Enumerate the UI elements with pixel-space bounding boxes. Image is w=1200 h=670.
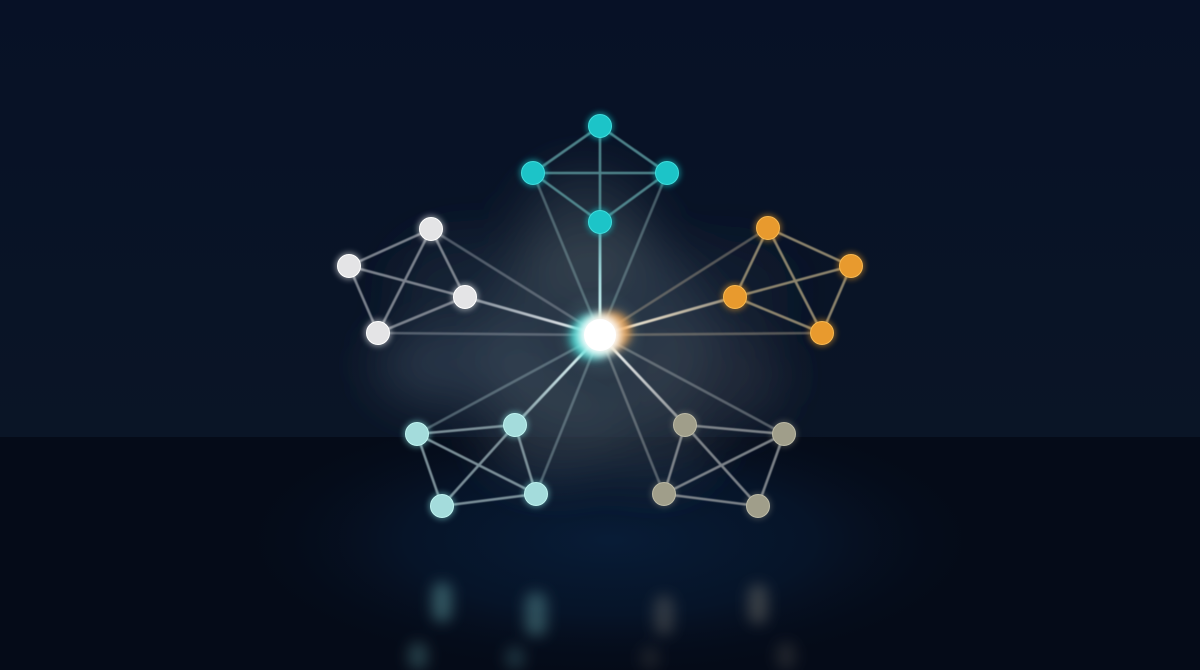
spokes: beige cluster — [600, 335, 784, 494]
spokes: light teal cluster — [417, 335, 600, 494]
reflection: beige nodes — [640, 584, 796, 670]
spokes: orange cluster — [600, 228, 822, 335]
white cluster links — [349, 229, 465, 333]
cluster: light teal (lower left) — [404, 412, 550, 520]
spokes: white cluster — [378, 229, 600, 335]
cluster: orange (right) — [722, 214, 864, 346]
floor reflections — [408, 582, 796, 670]
cluster: teal (top) — [520, 112, 680, 236]
cluster: white (left) — [336, 216, 478, 346]
beige cluster links — [664, 425, 784, 506]
reflection: teal nodes — [408, 582, 547, 670]
central glowing hub — [554, 289, 646, 381]
spokes: teal cluster — [533, 173, 667, 335]
orange cluster links — [735, 228, 851, 333]
white cluster nodes — [336, 216, 478, 346]
teal cluster links — [533, 126, 667, 222]
orange cluster nodes — [722, 214, 864, 346]
background wall — [0, 0, 1200, 437]
light teal cluster nodes — [404, 412, 550, 520]
beige cluster nodes — [650, 412, 798, 520]
cluster: beige (lower right) — [650, 412, 798, 520]
light teal cluster links — [417, 425, 536, 506]
teal cluster nodes — [520, 112, 680, 236]
spokes from hub to clusters — [378, 173, 822, 494]
floor — [0, 405, 1200, 670]
smoke haze behind the hub — [375, 170, 790, 485]
